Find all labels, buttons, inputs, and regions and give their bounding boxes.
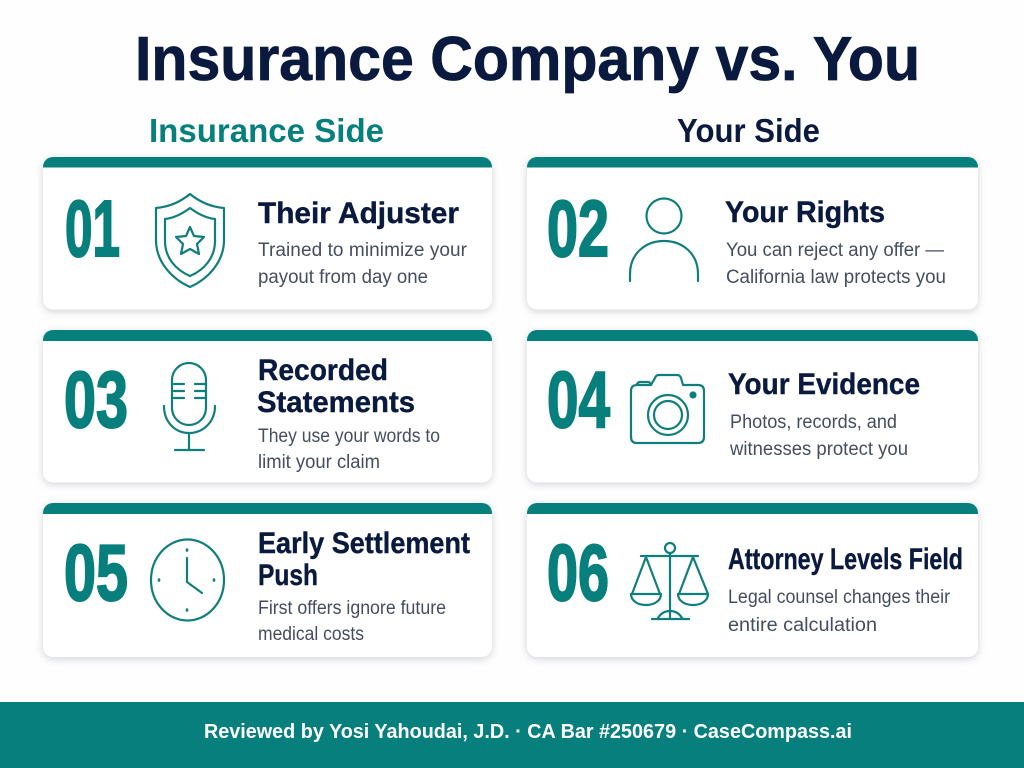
description: Legal counsel changes their xyxy=(728,587,951,608)
description: Trained to minimize your xyxy=(258,240,468,261)
heading: early settlement push xyxy=(258,527,470,592)
icon: person xyxy=(630,198,698,281)
heading: recorded statements: Statements xyxy=(257,386,415,419)
description: medical costs xyxy=(258,624,364,645)
panel: 06 attorney levels field xyxy=(527,503,978,657)
panel: 01 their adjuster xyxy=(43,157,492,310)
title: Insurance Company vs. You xyxy=(135,25,920,94)
description: witnesses protect you xyxy=(729,439,908,460)
heading: early settlement push: Early Settlement xyxy=(258,527,470,560)
description xyxy=(726,240,946,288)
description xyxy=(258,426,440,473)
number 02: 02 xyxy=(547,184,609,273)
heading: recorded statements: Recorded xyxy=(258,354,388,387)
panel: 05 early settlement push xyxy=(43,503,492,657)
heading: attorney levels field: Attorney Levels Field xyxy=(728,543,963,576)
number 04: 04 xyxy=(547,355,610,444)
description: California law protects you xyxy=(726,267,946,288)
description xyxy=(258,240,468,288)
description: entire calculation xyxy=(728,615,877,636)
heading: recorded statements xyxy=(257,354,415,419)
heading: your rights: Your Rights xyxy=(725,196,885,229)
panel: 03 recorded statements xyxy=(43,330,492,482)
heading: insurance side: Insurance Side xyxy=(149,112,384,149)
icon: shield with star xyxy=(156,194,224,287)
description: limit your claim xyxy=(258,452,380,473)
footer text: Reviewed by Yosi Yahoudai, J.D. · CA Bar #250679 · CaseCompass.ai xyxy=(204,721,852,743)
description: First offers ignore future xyxy=(258,598,446,619)
description: They use your words to xyxy=(258,426,440,447)
panel: 02 your rights xyxy=(527,157,978,310)
number 05: 05 xyxy=(64,528,128,617)
number 06: 06 xyxy=(547,528,609,617)
number 01: 01 xyxy=(65,184,120,273)
heading: their adjuster: Their Adjuster xyxy=(258,197,459,230)
icon: scales of justice xyxy=(631,543,708,619)
heading: early settlement push: Push xyxy=(258,559,318,592)
description: You can reject any offer — xyxy=(726,240,944,261)
heading: your side: Your Side xyxy=(677,112,820,149)
description xyxy=(729,412,908,460)
icon: microphone xyxy=(164,363,215,450)
icon: camera xyxy=(631,375,704,443)
number 03: 03 xyxy=(64,355,128,444)
description xyxy=(258,598,446,645)
description: Photos, records, and xyxy=(730,412,897,433)
footer bar xyxy=(0,702,1024,768)
description xyxy=(728,587,951,636)
heading: your evidence: Your Evidence xyxy=(728,368,920,401)
description: payout from day one xyxy=(258,267,428,288)
panel: 04 your evidence xyxy=(527,330,978,482)
icon: clock xyxy=(151,540,224,620)
